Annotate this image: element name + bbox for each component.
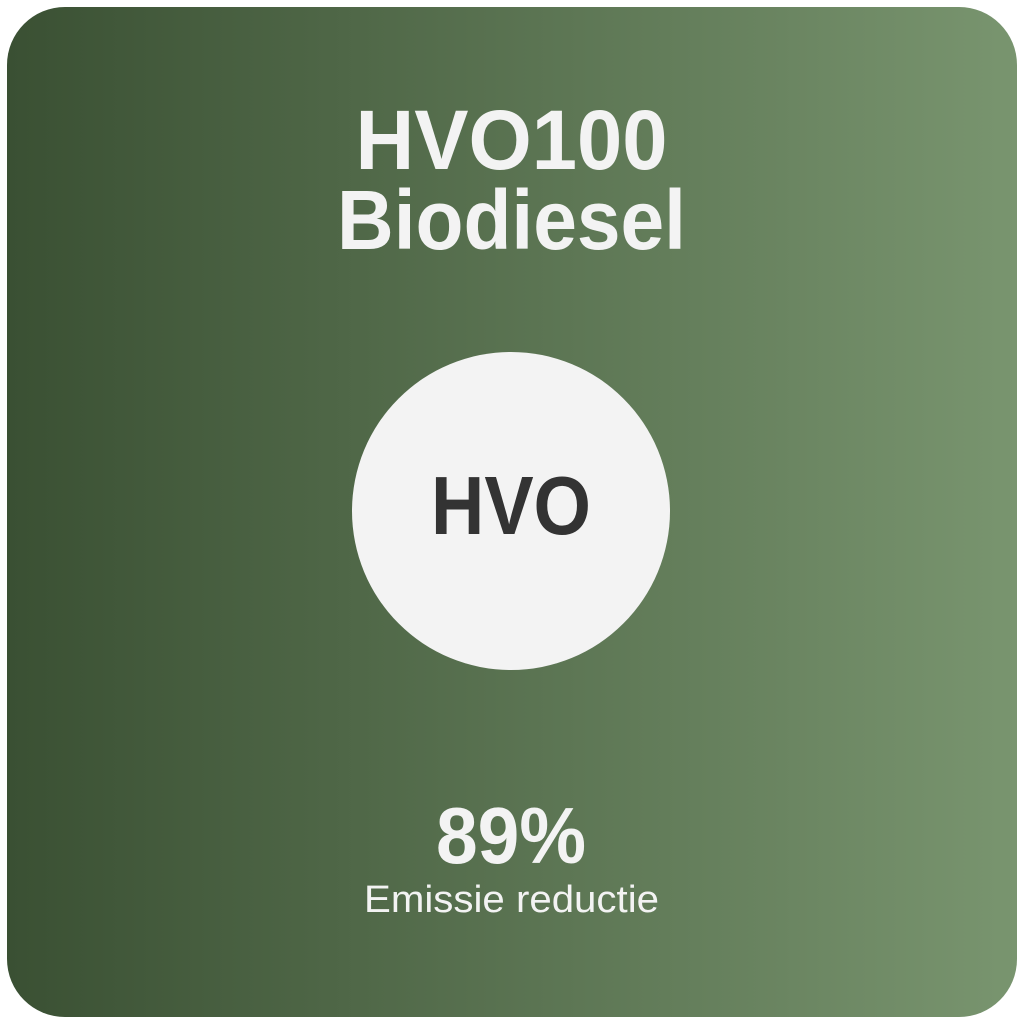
title: HVO100 [356,93,668,187]
title: Biodiesel [337,173,686,267]
icon: HVO circle [352,352,670,670]
statistic caption: Emissie reductie [364,879,659,921]
statistic: 89%: 89% [436,791,586,880]
title [337,93,686,267]
circle label: HVO [431,459,591,552]
